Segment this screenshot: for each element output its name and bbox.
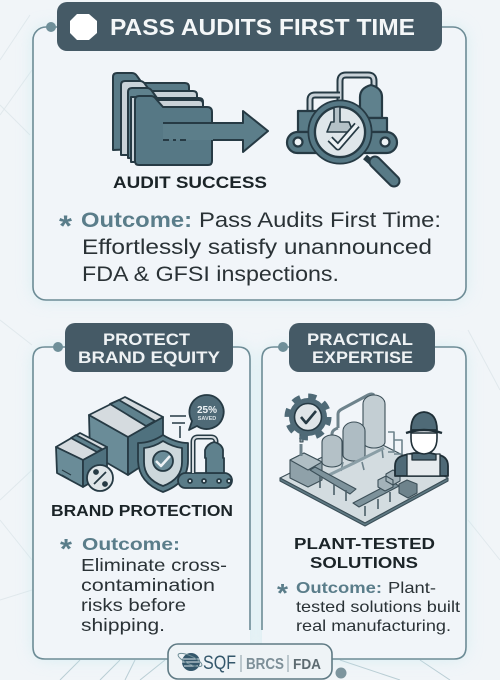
heading: protect brand equity: BRAND EQUITY: [78, 348, 221, 367]
icon: boxes, shield and conveyor: [56, 395, 232, 492]
text block: outcome: *: [60, 533, 72, 564]
heading: practical expertise: PRACTICAL: [307, 330, 413, 349]
label: 25% saved: 25%: [197, 405, 217, 416]
heading: protect brand equity: [65, 323, 233, 372]
text block: outcome: FDA & GFSI inspections.: [82, 262, 339, 286]
text block: outcome: risks before: [81, 595, 186, 615]
node dot: [336, 668, 346, 678]
label: 25% saved: [197, 405, 217, 422]
badge: certifications: SQF: [203, 653, 236, 674]
text block: outcome: *: [277, 578, 289, 608]
badge: certifications: BRCS: [246, 656, 284, 673]
panel: protect brand equity: [33, 323, 250, 659]
badge: certifications: FDA: [293, 656, 321, 673]
text block: outcome: Plant-: [388, 580, 436, 597]
text block: outcome: Outcome:: [296, 580, 382, 597]
heading: practical expertise: [289, 323, 435, 372]
icon: sqf globe: [177, 651, 203, 671]
label: plant-tested solutions: PLANT-TESTED: [294, 536, 435, 553]
label: plant-tested solutions: [294, 536, 435, 572]
heading: pass audits first time: PASS AUDITS FIRST TIME: [110, 14, 415, 40]
heading: pass audits first time: [57, 2, 442, 51]
text block: outcome: shipping.: [81, 615, 165, 635]
text block: outcome: [59, 208, 441, 286]
text block: outcome: [277, 578, 461, 635]
panel: pass audits first time: [33, 2, 466, 300]
label: brand protection: BRAND PROTECTION: [51, 503, 233, 520]
heading: practical expertise: EXPERTISE: [312, 348, 413, 367]
text block: outcome: tested solutions built: [296, 599, 461, 616]
icon: folders with arrow: [113, 73, 268, 165]
text block: outcome: real manufacturing.: [296, 618, 451, 635]
text block: outcome: Pass Audits First Time:: [199, 208, 441, 232]
heading: protect brand equity: PROTECT: [103, 330, 191, 349]
text block: outcome: *: [59, 210, 72, 243]
panel: practical expertise: [262, 323, 466, 659]
badge: certifications: [168, 644, 332, 679]
text block: outcome: [60, 533, 227, 635]
text block: outcome: Outcome:: [81, 208, 192, 232]
icon: machine under magnifier: [287, 75, 397, 181]
text block: outcome: contamination: [81, 575, 215, 595]
text block: outcome: Effortlessly satisfy unannounced: [82, 235, 432, 259]
text block: outcome: Eliminate cross-: [81, 555, 227, 575]
label: plant-tested solutions: SOLUTIONS: [310, 555, 418, 572]
label: 25% saved: SAVED: [198, 416, 216, 422]
text block: outcome: Outcome:: [82, 534, 180, 554]
icon: factory floor, gear and worker: [280, 394, 448, 526]
label: audit success: AUDIT SUCCESS: [113, 173, 267, 192]
